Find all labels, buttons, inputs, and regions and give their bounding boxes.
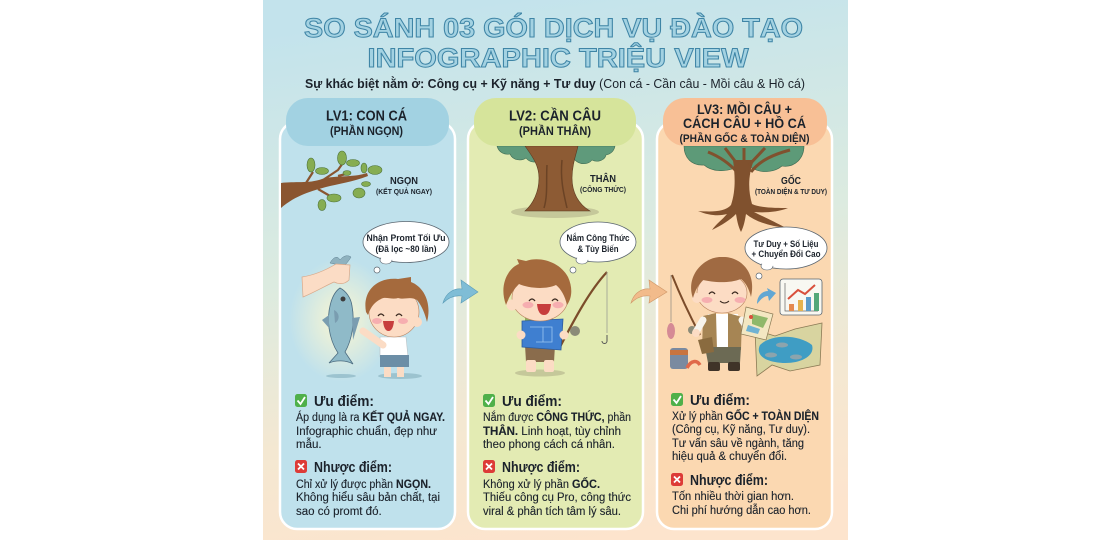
header LV3 pill: CÁCH CÂU + HỒ CÁ xyxy=(683,114,806,131)
label: thân: THÂN xyxy=(590,172,616,185)
pros and cons: Xử lý phần GỐC + TOÀN DIỆN xyxy=(672,409,819,423)
speech bubble xyxy=(560,222,636,273)
icon: check xyxy=(295,394,307,407)
icon: check xyxy=(671,393,683,406)
title: INFOGRAPHIC TRIỆU VIEW xyxy=(368,42,749,73)
header LV3 pill xyxy=(663,98,827,146)
pros and cons: Ưu điểm: xyxy=(690,393,750,409)
pros and cons: Nắm được CÔNG THỨC, phần xyxy=(483,411,631,424)
pros and cons: mẫu. xyxy=(296,438,322,451)
pros and cons: Tốn nhiều thời gian hơn. xyxy=(672,491,794,503)
icon: arrow up xyxy=(757,288,776,304)
pros and cons: viral & phân tích tâm lý sâu. xyxy=(483,506,621,518)
header LV3 pill: (PHẦN GỐC & TOÀN DIỆN) xyxy=(680,131,810,145)
icon: hand holding fish xyxy=(289,256,393,382)
panel: LV2 cần câu xyxy=(468,98,643,529)
header LV2 pill: LV2: CẦN CÂU xyxy=(509,106,601,124)
pros and cons: Infographic chuẩn, đẹp như xyxy=(296,426,437,438)
label: ngọn xyxy=(376,176,432,196)
speech bubble: (Đã lọc ~80 lần) xyxy=(376,244,437,254)
pros and cons: Chỉ xử lý được phần NGỌN. xyxy=(296,479,431,491)
label: thân: (CÔNG THỨC) xyxy=(580,185,626,194)
pros and cons: Nhược điểm: xyxy=(314,460,392,476)
icon: tree trunk xyxy=(497,146,615,218)
pros and cons xyxy=(483,394,631,518)
header LV2 pill xyxy=(474,98,636,146)
arrow: LV2 to LV3 xyxy=(631,280,667,303)
icon: cross xyxy=(483,460,495,473)
label: gốc xyxy=(755,173,827,196)
pros and cons: Nhược điểm: xyxy=(502,460,580,476)
pros and cons xyxy=(295,394,445,518)
pros and cons: Nhược điểm: xyxy=(690,473,768,489)
label: gốc: GỐC xyxy=(781,173,801,187)
icon: cross xyxy=(295,460,307,473)
LV1 header pill: LV1: CON CÁ xyxy=(326,108,407,124)
pros and cons: hiệu quả & chuyển đổi. xyxy=(672,451,787,463)
icon: check xyxy=(483,394,495,407)
speech bubble: Nắm Công Thức xyxy=(566,232,630,243)
pros and cons: Áp dụng là ra KẾT QUẢ NGAY. xyxy=(296,411,445,424)
icon: fishing rod and bait xyxy=(667,275,700,369)
header LV2 pill: (PHẦN THÂN) xyxy=(519,125,591,138)
label: ngọn: (KẾT QUẢ NGAY) xyxy=(376,186,432,196)
icon: lake map xyxy=(755,323,822,376)
background xyxy=(263,0,848,540)
pros and cons xyxy=(671,393,819,517)
speech bubble: + Chuyển Đổi Cao xyxy=(752,249,821,259)
pros and cons: Ưu điểm: xyxy=(502,394,562,410)
pros and cons: (Công cụ, Kỹ năng, Tư duy). xyxy=(672,424,810,436)
pros and cons: theo phong cách cá nhân. xyxy=(483,439,615,451)
label: ngọn: NGỌN xyxy=(390,176,418,187)
speech bubble: & Tùy Biến xyxy=(578,244,618,254)
icon: small map xyxy=(741,307,773,340)
speech bubble: Nhận Promt Tối Ưu xyxy=(366,233,446,243)
speech bubble xyxy=(363,222,449,273)
speech bubble: Tư Duy + Số Liệu xyxy=(754,239,818,249)
pros and cons: THÂN. Linh hoạt, tùy chỉnh xyxy=(483,425,621,438)
pros and cons: Thiếu công cụ Pro, công thức xyxy=(483,492,631,504)
icon: fishing rod xyxy=(560,272,607,347)
icon: tree branch with leaves xyxy=(281,151,382,210)
LV1 header pill: (PHẦN NGỌN) xyxy=(330,125,403,138)
pros and cons: Ưu điểm: xyxy=(314,394,374,410)
icon: cross xyxy=(671,473,683,486)
title xyxy=(304,12,803,73)
panel: LV1 con cá xyxy=(280,98,455,529)
pros and cons: Không hiểu sâu bản chất, tại xyxy=(296,492,440,504)
icon: boy in vest xyxy=(691,257,754,371)
label: gốc: (TOÀN DIỆN & TƯ DUY) xyxy=(755,187,827,196)
speech bubble xyxy=(745,227,827,279)
icon: smiling boy xyxy=(363,277,429,379)
pros and cons: Không xử lý phần GỐC. xyxy=(483,477,600,491)
title: SO SÁNH 03 GÓI DỊCH VỤ ĐÀO TẠO xyxy=(304,12,803,43)
icon: boy with blueprint xyxy=(503,259,571,376)
subtitle: Sự khác biệt nằm ở: Công cụ + Kỹ năng + Tư duy (Con cá - Cần câu - Mồi câu & Hồ cá) xyxy=(305,76,805,91)
label: thân xyxy=(580,172,626,194)
panel: LV3 mồi câu xyxy=(657,98,832,529)
LV1 header pill xyxy=(286,98,449,146)
pros and cons: sao có promt đó. xyxy=(296,506,382,518)
header LV3 pill: LV3: MỒI CÂU + xyxy=(697,100,792,117)
pros and cons: Tư vấn sâu về ngành, tăng xyxy=(672,438,804,450)
icon: tree with roots xyxy=(684,146,804,232)
arrow: LV1 to LV2 xyxy=(443,280,478,303)
pros and cons: Chi phí hướng dẫn cao hơn. xyxy=(672,504,811,517)
icon: growth chart xyxy=(780,279,822,315)
